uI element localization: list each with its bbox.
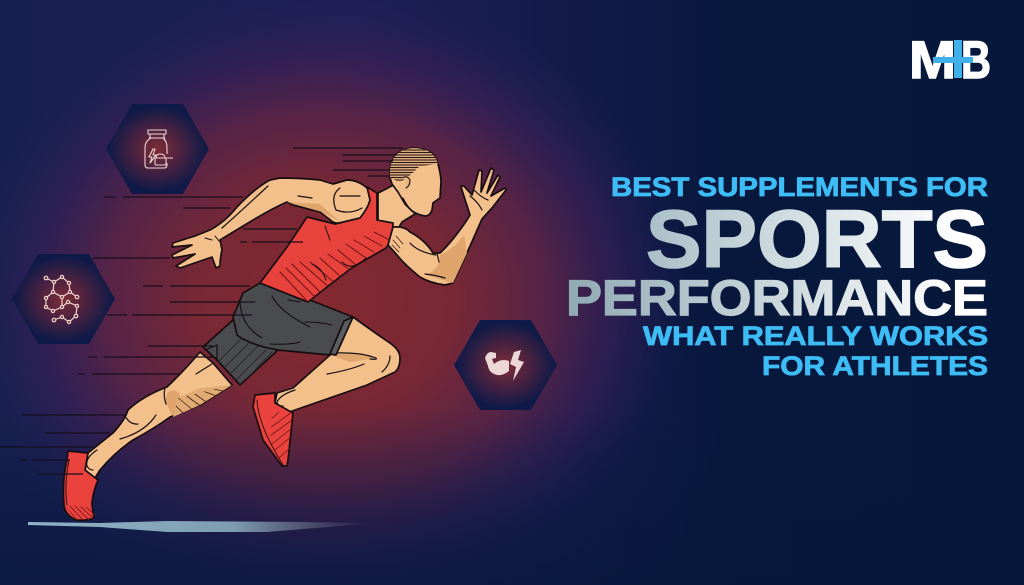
rear shoe bbox=[63, 451, 98, 521]
subtitle line 2: FOR ATHLETES bbox=[762, 351, 988, 381]
hexagon badge: muscle and bolt bbox=[454, 320, 557, 410]
title line 1: BEST SUPPLEMENTS FOR bbox=[611, 172, 988, 202]
title line 2: SPORTS bbox=[646, 194, 988, 285]
front leg bbox=[275, 317, 400, 413]
neck and torso skin bbox=[378, 184, 415, 237]
runner bbox=[63, 148, 506, 521]
head bbox=[385, 148, 445, 216]
hexagon badge: supplement jar bbox=[106, 104, 209, 194]
logo letters: B bbox=[961, 31, 991, 90]
logo letters bbox=[909, 31, 991, 90]
front shoe bbox=[253, 393, 293, 466]
tank top bbox=[260, 187, 393, 302]
far forearm and upper arm bbox=[172, 178, 371, 268]
title block bbox=[566, 172, 988, 381]
icon: molecule bbox=[44, 275, 79, 324]
speed lines bbox=[0, 148, 403, 474]
ground shadow bbox=[28, 521, 367, 532]
logo plus bbox=[933, 40, 973, 78]
logo letters: M bbox=[909, 31, 956, 90]
hexagon badge: molecule bbox=[12, 254, 115, 344]
icon: supplement jar bbox=[145, 130, 173, 168]
icon: flexed arm and lightning bbox=[485, 350, 524, 381]
rear shorts leg bbox=[203, 320, 278, 385]
subtitle line 1: WHAT REALLY WORKS bbox=[643, 321, 988, 351]
logo bbox=[909, 31, 991, 90]
rear leg bbox=[85, 352, 232, 478]
near arm and hand bbox=[388, 168, 506, 285]
title line 3: PERFORMANCE bbox=[566, 270, 988, 326]
shorts bbox=[233, 283, 353, 355]
